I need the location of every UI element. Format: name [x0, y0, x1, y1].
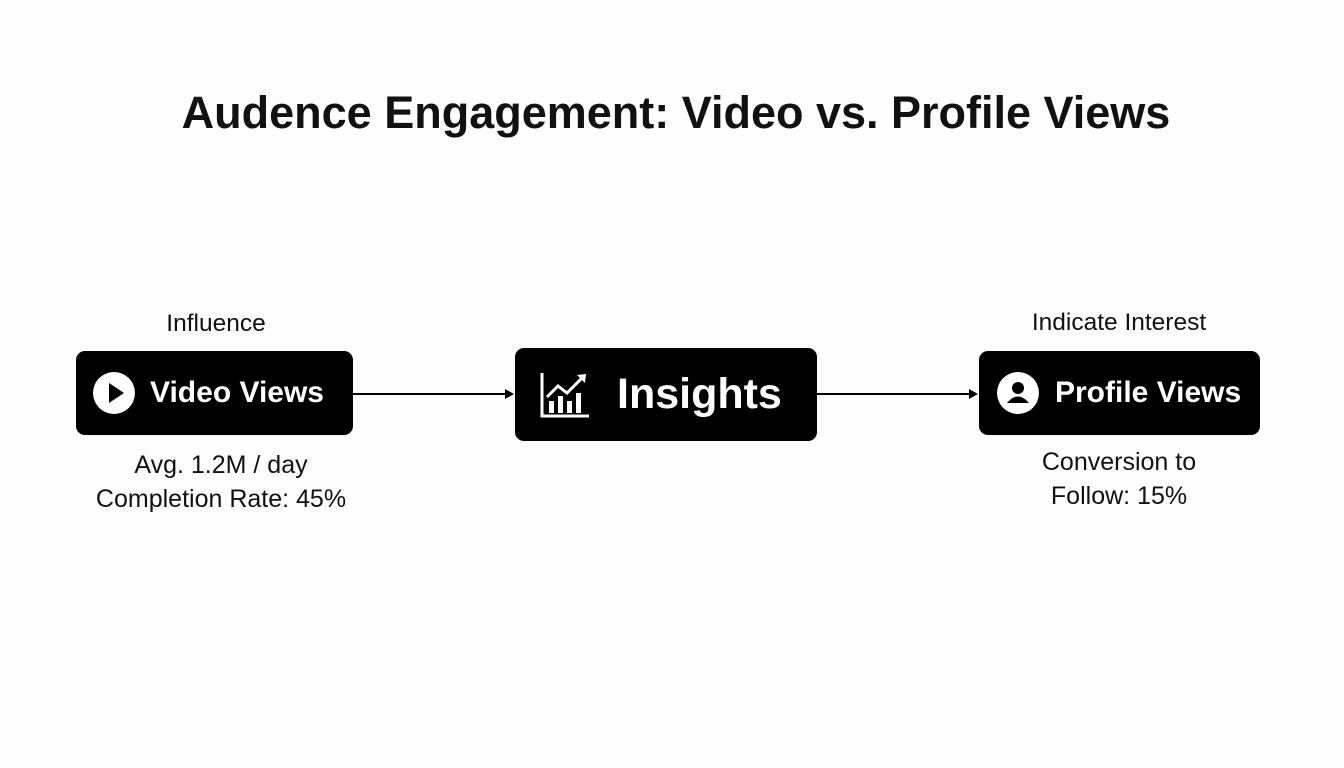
text: video stats: Completion Rate: 45%: [96, 485, 346, 513]
text: profile stats: Conversion to: [1042, 448, 1196, 476]
title: Audence Engagement: Video vs. Profile Views: [182, 87, 1170, 138]
box: insights: [515, 348, 817, 441]
icon: user: [997, 372, 1039, 414]
arrow: insights to profile: [817, 389, 978, 399]
text: video stats: Avg. 1.2M / day: [134, 451, 308, 479]
icon: chart: [540, 373, 589, 418]
label: indicate interest: Indicate Interest: [1032, 309, 1206, 336]
box: video views: [76, 351, 353, 435]
text: profile stats: Follow: 15%: [1051, 482, 1187, 510]
box: profile views: [979, 351, 1260, 435]
text: profile stats: [1042, 448, 1196, 510]
icon: play: [93, 372, 135, 414]
box: profile views: Profile Views: [1055, 376, 1241, 409]
text: video stats: [96, 451, 346, 513]
label: influence: Influence: [166, 310, 266, 337]
box: insights: Insights: [617, 370, 782, 418]
arrow: video to insights: [353, 389, 514, 399]
box: video views: Video Views: [150, 376, 324, 409]
